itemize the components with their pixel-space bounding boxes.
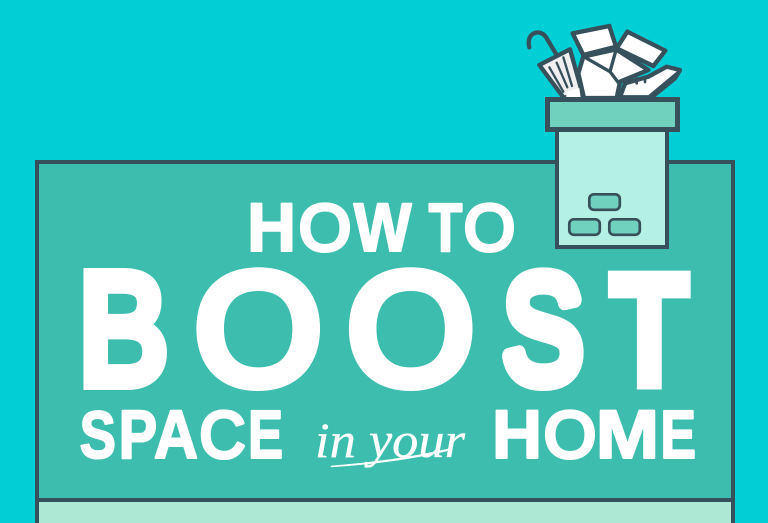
title word: SPACE: S (80, 398, 116, 472)
brick bottom left (569, 219, 600, 235)
panel: title banner (37, 162, 733, 500)
title line: BOOST: O (195, 241, 322, 418)
title line: HOW TO: O (464, 190, 515, 264)
chimney body (557, 130, 667, 247)
title line: BOOST: T (612, 246, 687, 413)
title line: HOW TO: W (354, 189, 412, 266)
title word: HOME (492, 396, 696, 473)
title word: SPACE: A (154, 396, 198, 473)
title word: SPACE (80, 396, 283, 473)
icon: umbrella (529, 32, 582, 97)
title word: SPACE: E (248, 396, 283, 473)
title word: SPACE: P (119, 398, 157, 473)
title line: HOW TO: H (247, 190, 296, 266)
icon: box of stored items (529, 26, 680, 247)
title line: HOW TO (247, 189, 515, 266)
title line: BOOST: B (78, 241, 168, 416)
icon: overflowing items (529, 26, 680, 98)
title word: HOME: O (544, 399, 596, 472)
brick bottom right (609, 219, 640, 235)
script text: in your: in your (315, 412, 466, 468)
icon: box right (617, 32, 665, 66)
title line: BOOST (78, 241, 687, 418)
icon: box centre (578, 49, 648, 98)
icon: shoe (620, 67, 680, 97)
chimney cap (548, 100, 678, 130)
brick top (589, 194, 620, 210)
title line: BOOST: S (503, 245, 583, 413)
icon: box top left (573, 26, 616, 55)
title word: HOME: H (492, 396, 542, 473)
title word: SPACE: C (200, 397, 245, 472)
panel: lower content strip (39, 502, 731, 523)
title word: HOME: M (596, 398, 659, 473)
title line: HOW TO: O (299, 192, 351, 265)
title line: BOOST: O (347, 241, 474, 418)
title line: HOW TO: T (429, 191, 462, 266)
panel edges: lower strip borders (37, 500, 733, 523)
title word: HOME: E (660, 397, 696, 472)
